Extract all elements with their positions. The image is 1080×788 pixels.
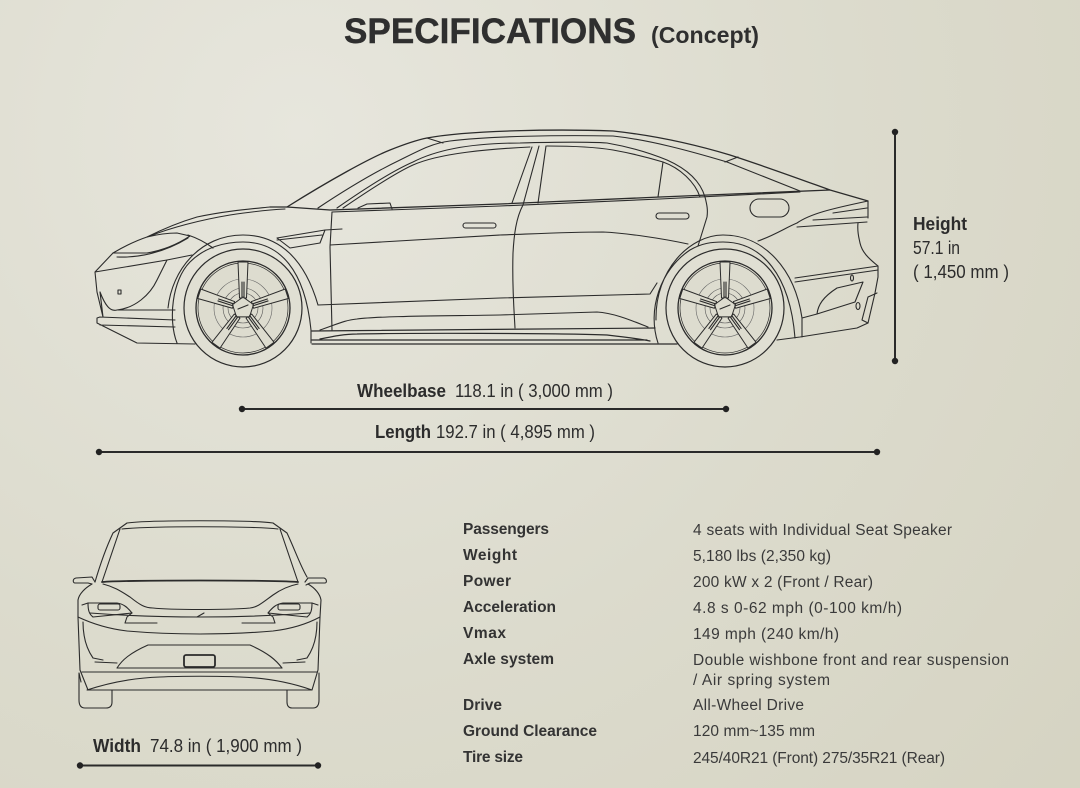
- specification labels: Tire size: [463, 749, 523, 766]
- side window frames: [318, 136, 800, 208]
- hood: [102, 580, 298, 582]
- title: (Concept): [651, 22, 759, 48]
- specification labels: Drive: [463, 697, 502, 714]
- specification labels: Weight: [463, 547, 517, 564]
- specification values: 5,180 lbs (2,350 kg): [693, 548, 831, 565]
- title: SPECIFICATIONS: [344, 12, 636, 51]
- specification values: 4.8 s 0-62 mph (0-100 km/h): [693, 600, 902, 617]
- side intakes: [83, 622, 317, 663]
- headlight: [113, 233, 190, 257]
- length dimension: Length: [375, 422, 431, 442]
- width dimension: 74.8 in ( 1,900 mm ): [150, 736, 302, 756]
- height dimension: [892, 129, 1009, 364]
- front view car drawing: [73, 521, 326, 708]
- rear wheel: [666, 249, 784, 367]
- front bumper: [97, 310, 195, 344]
- wheelbase dimension: Wheelbase: [357, 381, 446, 401]
- specification labels: Vmax: [463, 625, 506, 642]
- rear fender arch: [654, 235, 802, 343]
- door handles and fuel flap: [463, 223, 496, 228]
- specification values: 200 kW x 2 (Front / Rear): [693, 574, 873, 591]
- specification values: 4 seats with Individual Seat Speaker: [693, 522, 952, 539]
- side vent and mirror: [277, 203, 392, 248]
- specification values: 120 mm~135 mm: [693, 723, 815, 740]
- specification labels: Acceleration: [463, 599, 556, 616]
- height dimension: ( 1,450 mm ): [913, 262, 1009, 282]
- specification values: All-Wheel Drive: [693, 697, 804, 714]
- tail and rear: [758, 201, 868, 241]
- beltline: [270, 190, 830, 210]
- height dimension: 57.1 in: [913, 238, 960, 258]
- width dimension: Width: [93, 736, 141, 756]
- wheelbase dimension: [239, 381, 729, 412]
- wheelbase dimension: 118.1 in ( 3,000 mm ): [455, 381, 613, 401]
- specification values: Double wishbone front and rear suspension: [693, 652, 1009, 669]
- specification labels: Passengers: [463, 521, 549, 538]
- headlights: [88, 603, 132, 617]
- specification labels: Power: [463, 573, 511, 590]
- specification values: [693, 522, 1009, 767]
- roof and rear deck outline: [287, 130, 868, 207]
- lower lip: [79, 673, 312, 690]
- specification labels: [463, 521, 597, 766]
- front fender arch: [168, 235, 318, 343]
- front wheel: [184, 249, 302, 367]
- body sides: [78, 584, 321, 690]
- length dimension: 192.7 in ( 4,895 mm ): [436, 422, 595, 442]
- specification labels: Ground Clearance: [463, 723, 597, 740]
- doors and body lines: [330, 212, 688, 330]
- mirrors: [73, 577, 326, 585]
- height dimension: Height: [913, 214, 967, 234]
- specification labels: Axle system: [463, 651, 554, 668]
- hood and nose: [113, 207, 270, 253]
- side view car drawing: [95, 130, 878, 367]
- specification values: 245/40R21 (Front) 275/35R21 (Rear): [693, 750, 945, 767]
- specification values: 149 mph (240 km/h): [693, 626, 839, 643]
- tyres: [79, 673, 319, 708]
- lower grille: [82, 645, 317, 672]
- roof and windshield: [95, 521, 307, 582]
- length dimension: [96, 422, 880, 455]
- light bar and logo: [90, 613, 310, 623]
- specification values: / Air spring system: [693, 672, 830, 689]
- width dimension: [77, 736, 321, 769]
